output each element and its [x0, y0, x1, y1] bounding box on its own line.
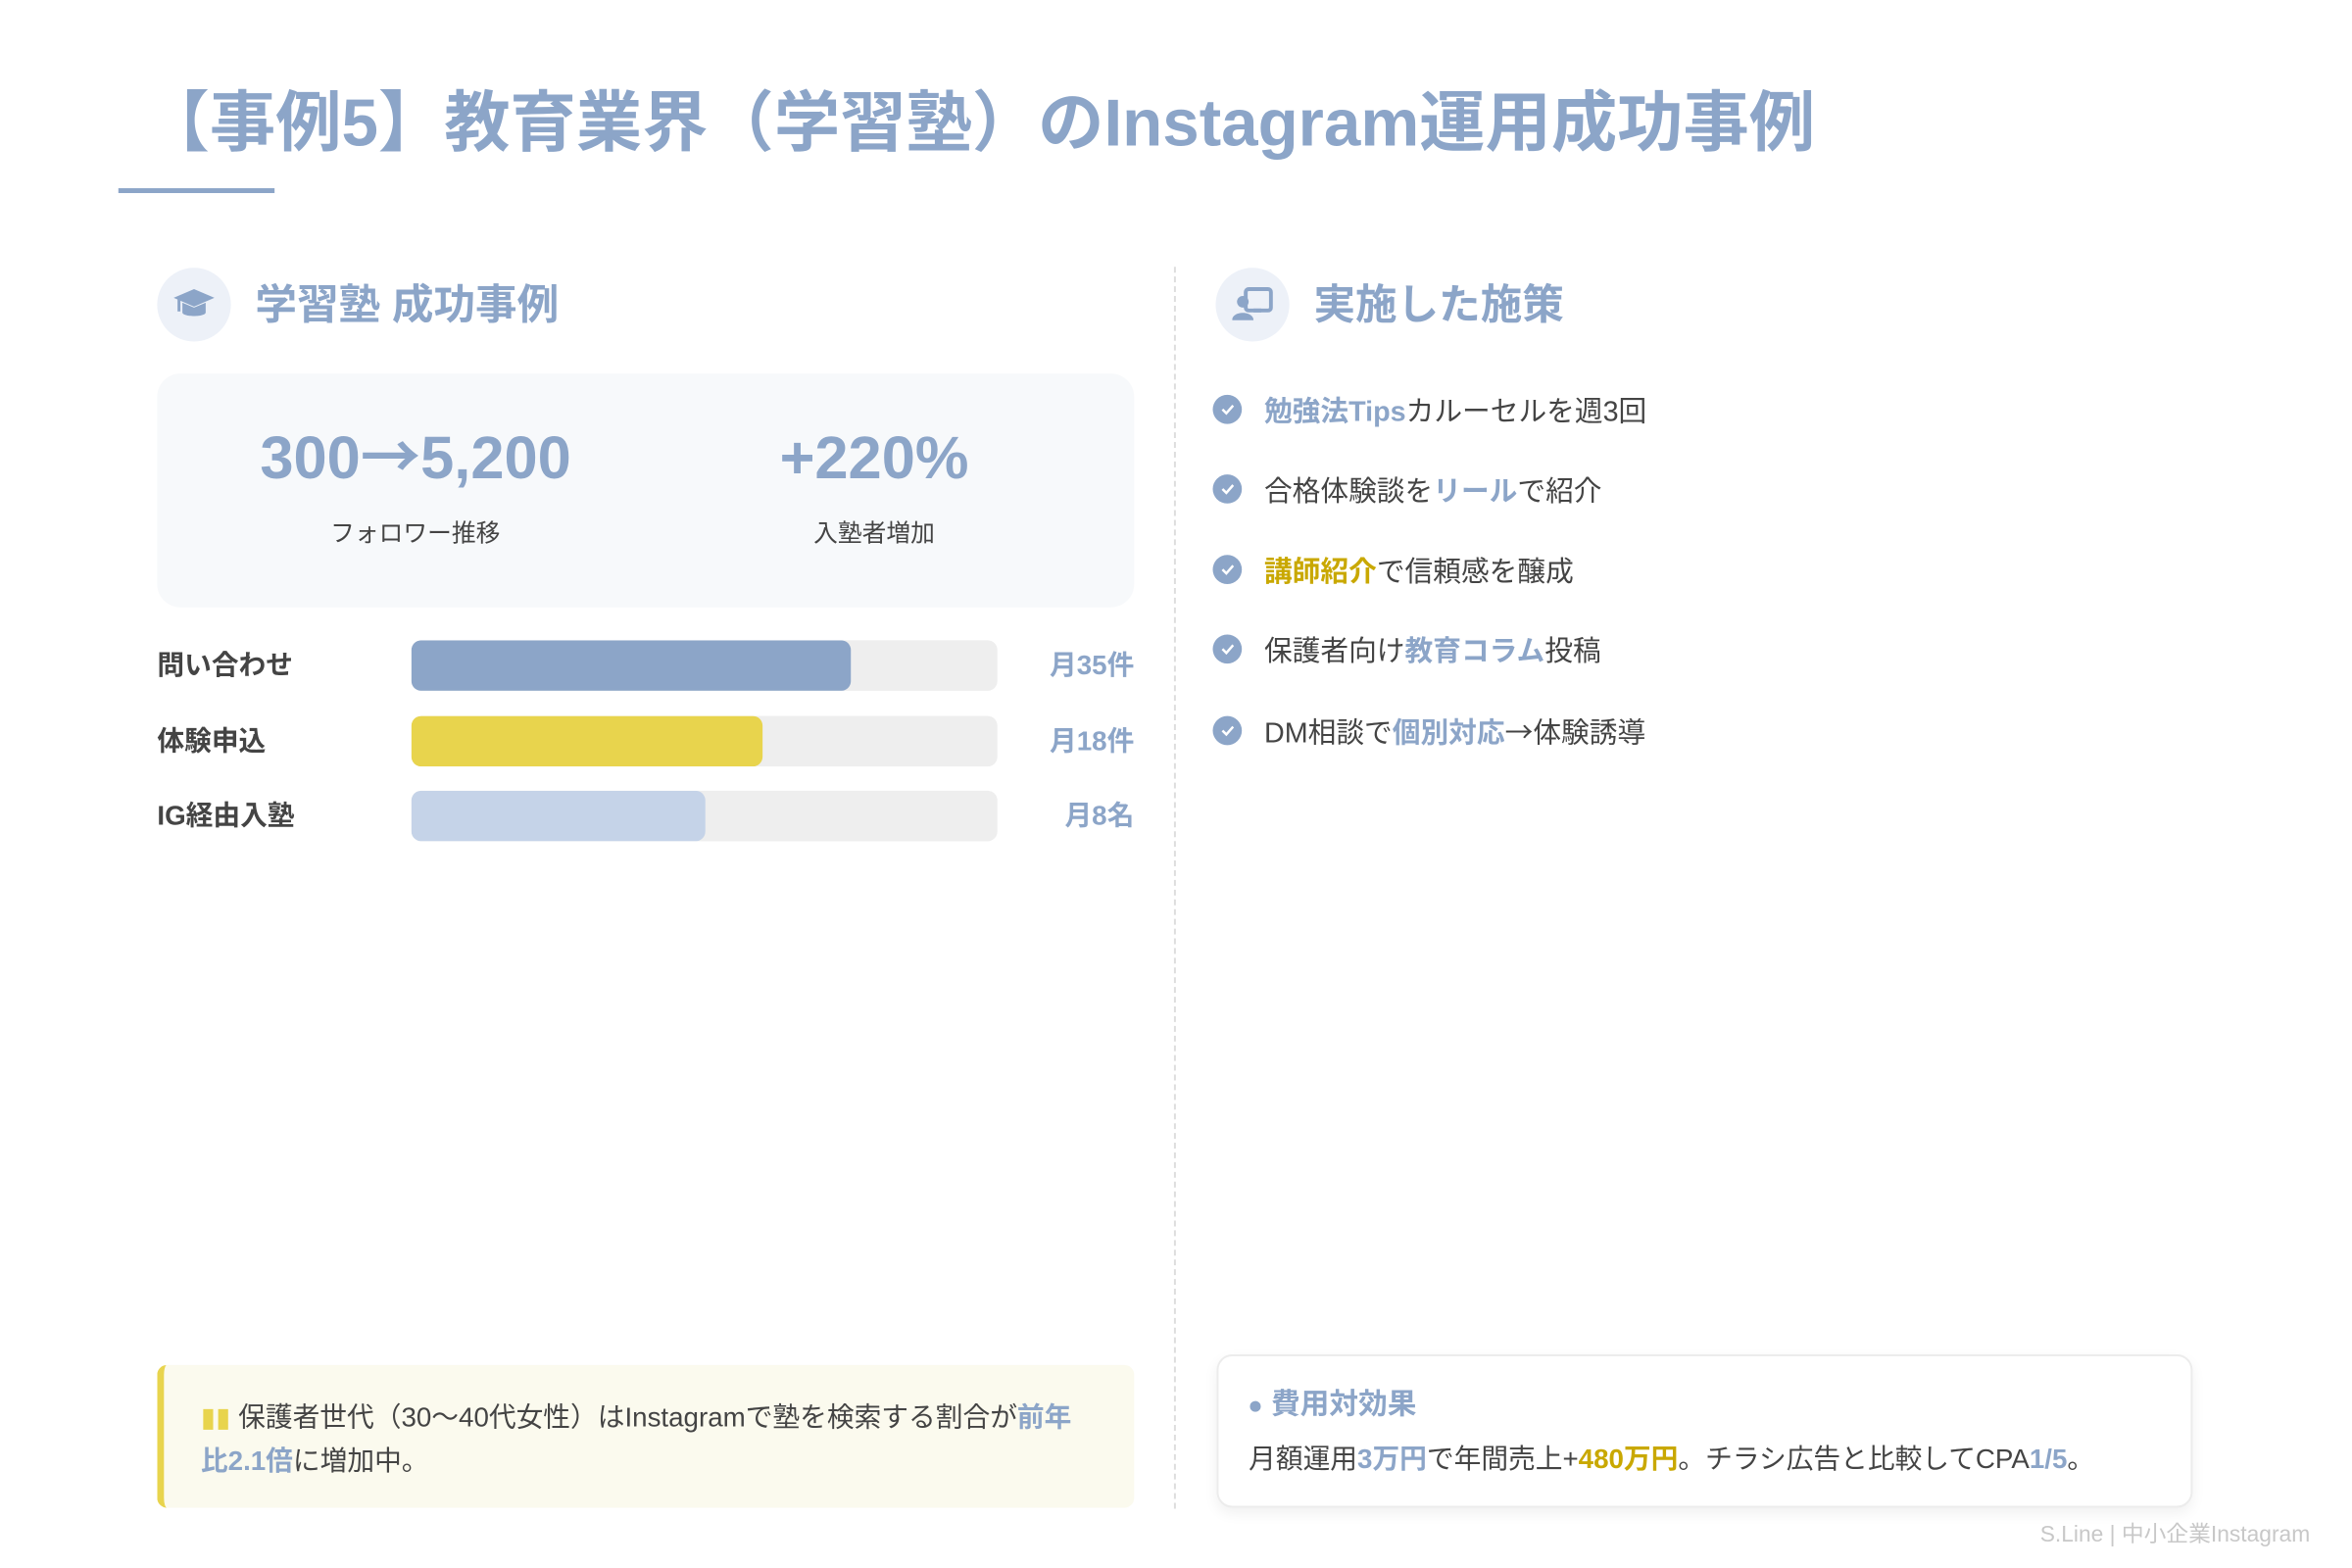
list: measures: 保護者向け教育コラム投稿 — [1264, 636, 1601, 667]
heading: 学習塾 成功事例 — [255, 282, 559, 329]
footer: S.Line | 中小企業Instagram — [2040, 1521, 2310, 1546]
stats box — [157, 373, 1134, 608]
icon: graduation cap — [157, 268, 231, 341]
stat: enrollment — [780, 425, 968, 547]
list: measures: 講師紹介で信頼感を醸成 — [1264, 557, 1574, 588]
bar chart: 体験申込 — [157, 726, 266, 756]
stat: followers: フォロワー推移 — [330, 520, 500, 547]
stat: enrollment: 入塾者増加 — [813, 520, 935, 547]
title: 【事例5】教育業界（学習塾）のInstagram運用成功事例 — [144, 86, 1815, 160]
bar chart: 月35件 — [1050, 650, 1134, 680]
icon: teacher — [1215, 268, 1290, 341]
bar chart — [157, 640, 1134, 841]
list: measures: 合格体験談をリールで紹介 — [1264, 476, 1602, 508]
bar chart: 月18件 — [1050, 726, 1134, 756]
list: measures: DM相談で個別対応→体験誘導 — [1264, 710, 1645, 751]
panel: right measures — [1215, 268, 1564, 341]
bar chart: 問い合わせ — [157, 650, 293, 680]
stat: enrollment: +220% — [780, 425, 968, 492]
card title: ● 費用対効果 — [1248, 1389, 1416, 1420]
bar chart: 月8名 — [1064, 801, 1134, 830]
bar chart: IG経由入塾 — [157, 801, 295, 830]
stat: followers: 300→5,200 — [260, 409, 571, 496]
stat: followers — [260, 409, 571, 547]
list: measures: 勉強法Tipsカルーセルを週3回 — [1264, 397, 1646, 428]
card text: 月額運用3万円で年間売上+480万円。チラシ広告と比較してCPA1/5。 — [1249, 1444, 2094, 1474]
list: measures — [1213, 394, 1646, 751]
panel: left results — [157, 268, 559, 341]
heading: 実施した施策 — [1313, 282, 1564, 329]
card: cost effectiveness — [1216, 1354, 2192, 1507]
callout: parents trend: ▮▮ 保護者世代（30〜40代女性）はInstagramで塾を検索する割合が前年比2.1倍に増加中。 — [201, 1402, 1071, 1476]
callout: parents trend — [157, 1365, 1134, 1507]
